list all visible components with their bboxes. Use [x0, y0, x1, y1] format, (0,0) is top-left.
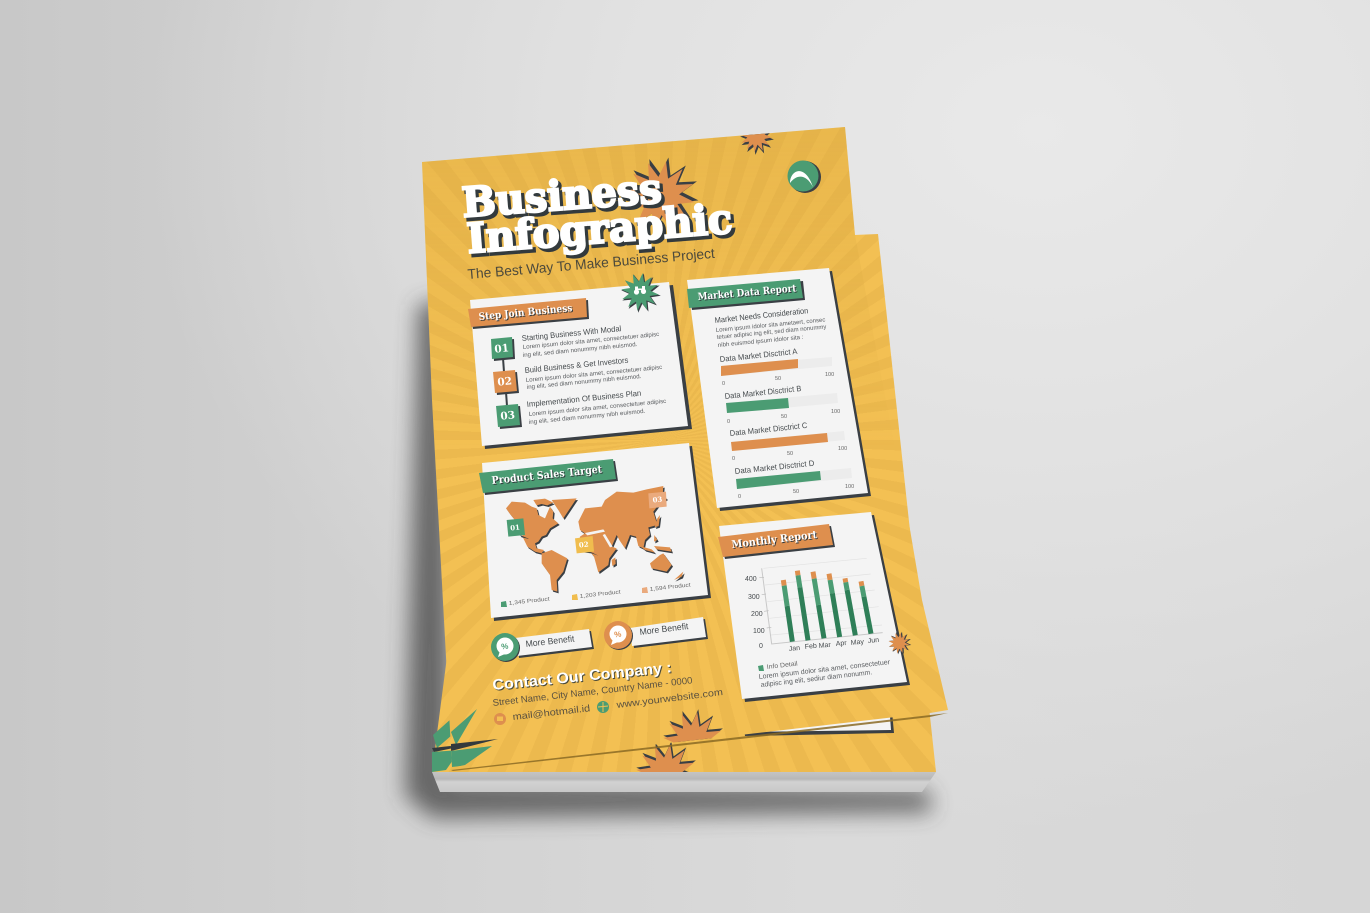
panel: product sales target [479, 443, 711, 621]
bar: district B: 0 [727, 419, 730, 425]
title: Infographic [465, 195, 734, 263]
bottom burst [664, 709, 723, 742]
lower sheet [432, 234, 936, 772]
top small burst [740, 133, 774, 155]
chart axis labels [745, 576, 880, 653]
contact block [492, 659, 724, 725]
heading: step join business: Step Join Business [479, 304, 574, 324]
more benefit green [491, 629, 594, 662]
bar: district C: 100 [838, 446, 847, 452]
title [460, 164, 737, 266]
bar: district A: 0 [722, 381, 725, 387]
bar: district B: Data Market Disctrict B [724, 384, 802, 401]
heading: market data report [687, 279, 805, 310]
chart axis labels: 300 [748, 594, 760, 601]
lower green burst [432, 718, 478, 772]
bar: district C: 50 [787, 451, 793, 457]
bar: district D: 50 [793, 489, 799, 495]
step 03: 03 [500, 409, 516, 423]
market intro text: Market Needs Consideration [714, 306, 809, 325]
map pin 03 [648, 492, 667, 508]
green burst badge [618, 270, 664, 316]
bar: district D: 0 [738, 494, 741, 500]
title: Business [460, 164, 663, 227]
step connector [503, 358, 507, 406]
bar: district A: Data Market Disctrict A [719, 347, 798, 364]
panel: step join business [468, 282, 692, 449]
green corner burst [451, 709, 498, 768]
map legend: 1,203 Product [580, 589, 622, 600]
heading: step join business [468, 298, 589, 329]
panel: monthly report [718, 512, 910, 702]
heading: product sales target: Product Sales Target [492, 464, 604, 488]
heading: product sales target: Product Sales Target [491, 463, 603, 487]
more benefit orange: % [614, 630, 622, 639]
chart axis labels: May [850, 639, 865, 647]
more benefit orange [604, 617, 708, 650]
icon: globe [597, 701, 609, 713]
small orange burst [887, 630, 913, 656]
map pin 02 [575, 536, 598, 556]
lower white panel [740, 690, 894, 736]
step 02: Lorem ipsum dolor sita amet, consectetuer adipisc [526, 365, 663, 384]
step 03: Lorem ipsum dolor sita amet, consectetuer adipisc [529, 399, 667, 418]
poster contents [422, 127, 912, 767]
market intro text: nibh euismod ipsum idolor sita : [718, 335, 804, 349]
top sheet background [422, 127, 948, 762]
title: Infographic [468, 198, 737, 266]
step 01 [491, 324, 660, 361]
heading: market data report: Market Data Report [698, 284, 798, 304]
bar: district A [719, 347, 834, 387]
chart axis labels: 200 [751, 611, 763, 618]
icon: binoculars [634, 286, 646, 295]
step 03: ing elit, sed diam nonummy nibh euismod. [529, 409, 646, 426]
logo badge [788, 160, 821, 193]
heading: market data report: Market Data Report [697, 283, 797, 303]
step 02: Build Business & Get Investors [524, 356, 629, 375]
chart legend and note: Lorem ipsum dolor sita amet, consectetuer [758, 659, 891, 681]
lower sheet details [432, 717, 894, 772]
step 01: Lorem ipsum dolor sita amet, consectetuer adipisc [523, 332, 660, 351]
bar: district C: 0 [732, 456, 735, 462]
bar: district B [724, 384, 840, 425]
step 01: 01 [494, 342, 510, 356]
chart axis labels: Jun [867, 637, 880, 645]
market intro text [714, 306, 827, 349]
contact block: Contact Our Company : [492, 659, 673, 694]
heading: product sales target [479, 459, 618, 495]
panel: market data report [687, 268, 871, 511]
market intro text: Lorem ipsum idolor sita ametaert, consec [716, 317, 826, 334]
map legend [501, 582, 692, 607]
chart legend and note: Info Detail [766, 660, 799, 671]
icon: mail [494, 713, 506, 725]
map pin 01: 01 [510, 523, 521, 532]
chart axis labels: Mar [818, 642, 832, 650]
map pin 01 [507, 518, 529, 539]
world map [506, 486, 685, 593]
bar: district D: 100 [845, 484, 854, 490]
heading: monthly report [718, 524, 835, 559]
chart legend and note: adipisc ing elit, sediur diam nonumm. [760, 669, 873, 689]
bar: district B: 50 [781, 414, 787, 420]
title: Business [463, 167, 666, 230]
step 02: ing elit, sed diam nonummy nibh euismod. [527, 374, 642, 391]
heading: step join business: Step Join Business [478, 303, 573, 323]
chart axis labels: 0 [759, 643, 763, 650]
more benefit orange: More Benefit [639, 621, 689, 637]
bar: district A: 50 [775, 376, 781, 382]
step 03 [496, 389, 667, 429]
chart axis labels: Apr [835, 640, 848, 648]
heading: monthly report: Monthly Report [731, 529, 818, 551]
bar: district C [729, 421, 847, 462]
chart axis labels: 400 [745, 576, 757, 583]
bar chart [745, 558, 883, 653]
chart axis labels: Jan [788, 645, 801, 653]
map legend: 1,345 Product [509, 596, 551, 607]
step 02 [493, 356, 663, 395]
bar: district B: 100 [831, 409, 840, 415]
lower burst [636, 742, 696, 772]
more benefit green: More Benefit [525, 633, 575, 649]
bar: district C: Data Market Disctrict C [729, 421, 808, 438]
contact block: www.yourwebsite.com [615, 687, 724, 711]
chart axis labels: 100 [753, 628, 765, 635]
subtitle: The Best Way To Make Business Project [467, 245, 715, 282]
step 03: Implementation Of Business Plan [526, 389, 642, 409]
bar: district A: 100 [825, 372, 834, 378]
map pin 03: 03 [652, 495, 663, 504]
title burst [619, 151, 705, 237]
heading: monthly report: Monthly Report [732, 530, 819, 552]
bar: district D: Data Market Disctrict D [734, 459, 815, 476]
contact block: mail@hotmail.id [512, 703, 591, 723]
step 01: Starting Business With Modal [521, 324, 622, 343]
map legend: 1,594 Product [650, 582, 692, 593]
chart axis labels: Feb [804, 643, 817, 651]
more benefit green: % [501, 642, 509, 651]
contact block: Contact Our Company : [493, 660, 674, 695]
market intro text: tetuer adipisc ing elit, sed diam nonummy [717, 324, 827, 341]
map pin 02: 02 [578, 540, 589, 549]
contact block: Street Name, City Name, Country Name - 0000 [492, 675, 693, 709]
step 01: ing elit, sed diam nonummy nibh euismod. [523, 342, 638, 359]
bar: district D [734, 459, 854, 500]
step 02: 02 [497, 375, 513, 389]
